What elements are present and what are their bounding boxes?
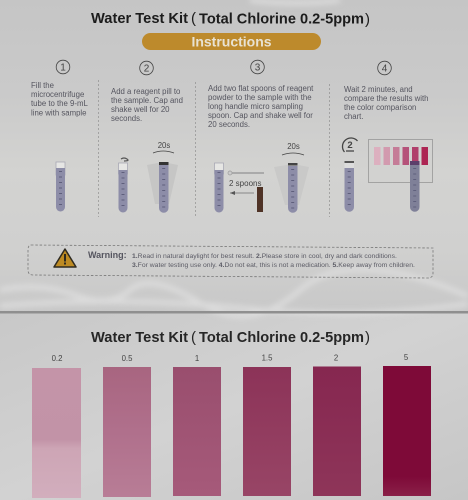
- step 3: [208, 60, 314, 213]
- timer icon: [342, 138, 358, 152]
- spoon, label, arrow and powder: [228, 171, 264, 212]
- warning box: 3.For water testing use only. 4.Do not eat, this is not a medication. 5.Keep away from children.: [132, 262, 415, 269]
- tube: [214, 163, 224, 212]
- step 1: line with sample: [31, 108, 86, 118]
- swatch 2: [313, 354, 361, 496]
- step 2: the sample. Cap and: [111, 96, 183, 105]
- swatch 1: [173, 354, 221, 496]
- title: Water Test Kit: [91, 11, 188, 27]
- step 4: compare the results with: [344, 94, 429, 103]
- chart title: [91, 329, 370, 346]
- step 2: seconds.: [111, 114, 142, 123]
- chart title: (: [191, 329, 196, 346]
- step 2: Add a reagent pill to: [111, 87, 181, 96]
- step 2: shake well for 20: [111, 105, 170, 114]
- chart title: ): [365, 329, 370, 346]
- step 3: 3: [255, 62, 261, 74]
- shaking tube: 20s: [158, 141, 170, 150]
- shaking tube: 20s: [287, 142, 300, 151]
- timer icon: 2: [347, 140, 353, 151]
- banner: Instructions: Instructions: [191, 34, 272, 50]
- title: Total Chlorine 0.2-5ppm: [199, 12, 364, 28]
- swatch 1.5: 1.5: [262, 354, 273, 362]
- step 3: spoon. Cap and shake well for: [208, 111, 313, 120]
- icon: warning triangle: [54, 249, 76, 267]
- swatch 5: 5: [404, 353, 409, 362]
- swatch 5: [383, 353, 431, 496]
- swatch 0.2: 0.2: [52, 354, 62, 363]
- title: ): [365, 11, 370, 28]
- shaking tube: [147, 141, 178, 213]
- step 3: Add two flat spoons of reagent: [208, 84, 314, 93]
- warning box: Warning:: [88, 250, 127, 260]
- tube: [344, 161, 354, 212]
- step 1: 1: [60, 62, 66, 74]
- comparison chart: [368, 140, 432, 212]
- spoon, label, arrow and powder: 2 spoons: [229, 179, 261, 188]
- step 1: tube to the 9-mL: [31, 99, 88, 108]
- title: (: [191, 10, 196, 27]
- swatch 1.5: [243, 354, 291, 496]
- warning box: [28, 245, 433, 278]
- step dividers: [98, 80, 330, 217]
- panel: color chart background: [0, 312, 468, 500]
- shaking tube: [274, 142, 309, 213]
- tube with pill: [118, 158, 128, 212]
- step 1: [31, 60, 88, 212]
- panel: instructions background: [0, 0, 468, 312]
- swatch 0.5: 0.5: [122, 354, 133, 363]
- step 4: chart.: [344, 112, 364, 121]
- step 4: Wait 2 minutes, and: [344, 85, 413, 94]
- step 3: powder to the sample with the: [208, 93, 312, 102]
- warning box: 1.Read in natural daylight for best result. 2.Please store in cool, dry and dark conditions.: [132, 253, 397, 260]
- chart title: Total Chlorine 0.2-5ppm: [199, 330, 364, 346]
- step 4: the color comparison: [344, 103, 416, 112]
- step 3: long handle micro sampling: [208, 102, 303, 111]
- chart title: Water Test Kit: [91, 330, 188, 346]
- step 4: 4: [382, 64, 388, 74]
- step 1: microcentrifuge: [31, 90, 84, 99]
- swatch 0.5: [103, 354, 151, 497]
- swatch 2: 2: [334, 354, 338, 362]
- step 4: [342, 61, 432, 212]
- step 3: 20 seconds.: [208, 120, 250, 129]
- swatch 1: 1: [195, 354, 199, 363]
- title: [91, 10, 370, 28]
- banner: Instructions: [142, 33, 321, 50]
- swatch 0.2: [32, 354, 81, 498]
- step 2: 2: [144, 64, 150, 74]
- step 1: Fill the: [31, 81, 54, 90]
- step 2: [111, 61, 183, 213]
